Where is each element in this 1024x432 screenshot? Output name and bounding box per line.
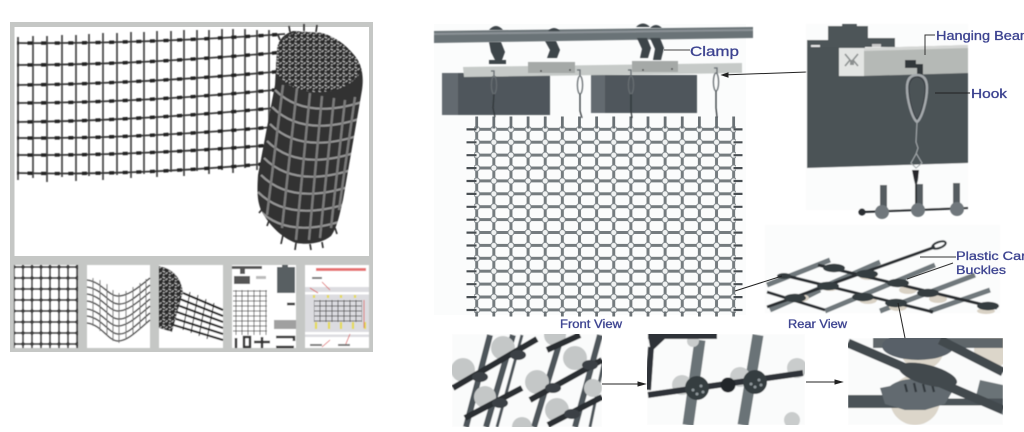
beam profile [839,48,864,76]
rail and boxes [442,61,742,115]
leader to buckle [898,303,905,338]
top strips [873,338,1003,348]
lower buckle [880,379,952,410]
thumbnail: wavy mesh [87,265,150,348]
panel: product photos [10,22,373,352]
lower strip [848,395,908,408]
clamp label: Clamp [690,43,739,59]
photo: rolled wire mesh [14,24,369,256]
panel: hook detail [806,24,1024,219]
dark panel [807,63,968,168]
dark wires [767,247,997,312]
loop end [931,240,947,250]
hook label [935,87,1008,101]
hook wires [491,68,719,118]
hanging beam label [925,29,1024,55]
hanging beam label: Hanging Beam [936,29,1024,43]
carabiner [907,75,927,122]
arrow one [602,382,645,386]
buckle rear mesh strips [767,260,990,311]
wires [453,335,602,425]
panel: front close-up [452,334,602,427]
balls [452,334,602,427]
thumbnail: roll side view [159,265,223,348]
stems [466,335,608,427]
plastic label [907,249,1024,279]
plastic label: Plastic Car [956,249,1024,263]
hanging beam [863,45,968,76]
plastic label: Buckles [956,263,1006,277]
front view label: Front View [560,319,623,331]
buckle nodes [777,264,999,310]
mesh sheet [17,29,285,182]
panel: rear view [735,225,1024,338]
hook [905,60,923,77]
overhead pipe [434,27,753,43]
balls [672,335,807,428]
mesh curtain front view [434,24,746,315]
panel frame [10,22,373,352]
stems [688,335,758,425]
panel: hanging system diagram [434,24,807,331]
main dark wires [848,340,1003,410]
thumbnail: installation diagram [232,264,296,348]
rear view label: Rear View [788,319,848,331]
beige balls [791,272,995,314]
nodes [685,376,709,400]
panel: middle close-up [647,334,807,428]
bracket [807,24,895,47]
dark frame [648,336,803,395]
hook label: Hook [971,87,1008,101]
thumbnail: dimension drawing [305,265,369,348]
leader to mesh [735,276,782,291]
mesh roll [257,24,364,250]
beige balls [902,356,942,367]
arrow two [806,380,842,384]
wire [911,122,922,168]
arrow to detail [722,72,807,77]
mesh node bar [862,208,968,212]
dots [472,350,598,419]
thumbnail: flat mesh [14,265,78,348]
clamp label [664,43,739,59]
panel: rear close-up [848,338,1003,425]
clamps [489,24,664,64]
